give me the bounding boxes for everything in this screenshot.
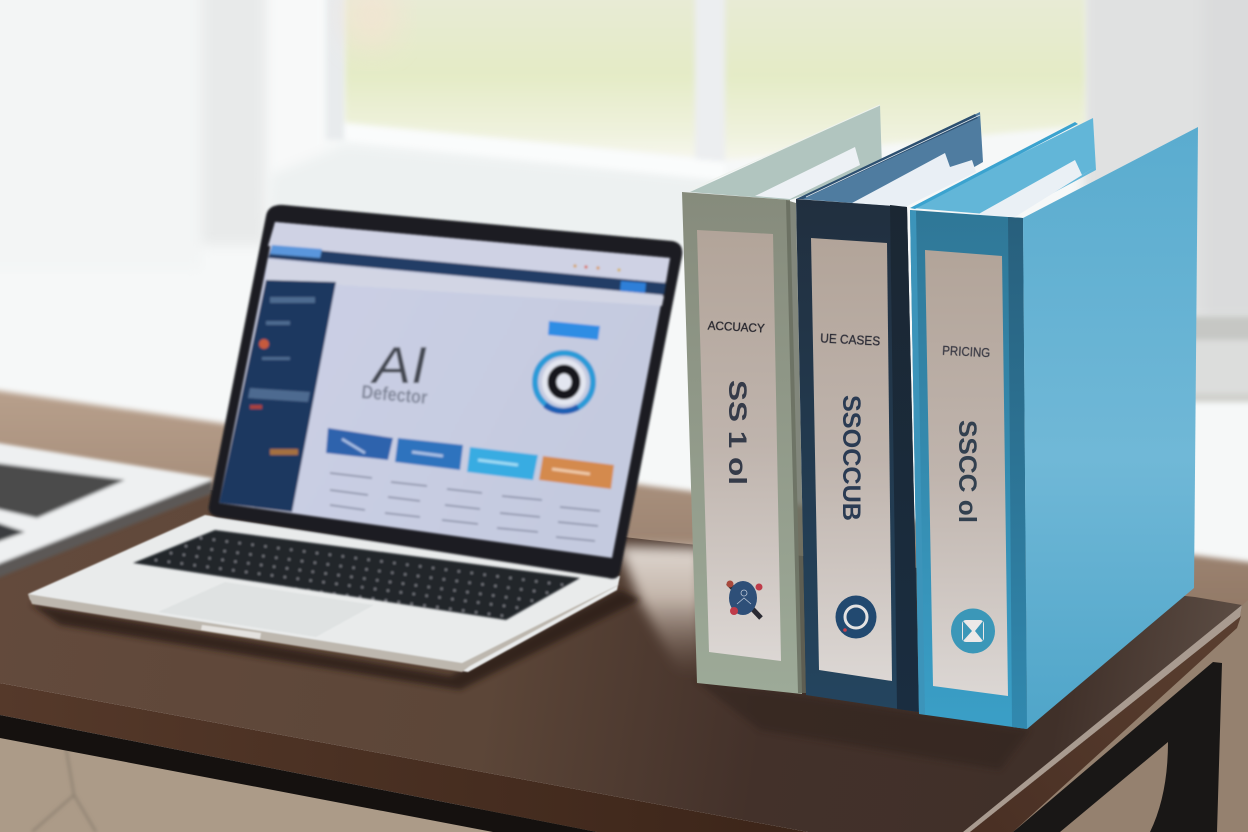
dashboard screen — [219, 222, 670, 558]
front latch — [201, 625, 261, 639]
metal table frame — [1013, 662, 1222, 832]
binder contact shadow — [695, 680, 1030, 770]
front cover face — [1023, 127, 1198, 729]
table top surface — [0, 490, 1242, 832]
table front edge — [0, 683, 808, 832]
peach tint in glass — [344, 0, 400, 50]
icon: teal badge — [951, 608, 995, 654]
blue tab — [270, 245, 322, 258]
tan wainscot band — [0, 388, 1248, 625]
status chip — [548, 321, 600, 340]
vertical label text: SSCC ol — [953, 420, 981, 523]
label title: ACCUACY — [707, 319, 765, 335]
sidebar — [219, 280, 336, 512]
laptop — [28, 205, 682, 672]
back cover top — [800, 112, 983, 207]
cable under table — [32, 748, 96, 832]
Defector label: Defector — [361, 382, 429, 409]
light strip under nav — [266, 260, 664, 306]
laptop base — [28, 515, 620, 672]
back cover spine — [910, 210, 1027, 729]
paper pages — [975, 160, 1095, 217]
floor and wall below table — [0, 730, 620, 832]
spine — [796, 199, 919, 712]
binder: pricing — [910, 118, 1198, 729]
paper pages — [755, 147, 860, 199]
label title: PRICING — [942, 344, 991, 360]
top bar icons — [573, 264, 621, 272]
spine label — [925, 250, 1008, 696]
icon: target badge — [836, 596, 876, 638]
binder: use cases — [796, 112, 983, 712]
table — [0, 490, 1242, 832]
ring gauge — [535, 353, 593, 411]
laptop screen bezel — [209, 205, 682, 579]
paper pages — [852, 153, 976, 207]
AI wordmark: AI — [370, 337, 427, 395]
spine label — [811, 238, 892, 681]
metric tiles — [326, 428, 393, 460]
keyboard — [133, 530, 580, 620]
trackpad — [158, 582, 374, 637]
spine — [682, 192, 802, 694]
sill under the window — [266, 145, 730, 255]
vertical label text: SSOCCUB — [837, 395, 865, 521]
back cover top — [690, 105, 882, 200]
account button — [620, 281, 646, 293]
label title: UE CASES — [820, 330, 881, 349]
spine label — [697, 230, 781, 661]
icon: network badge — [726, 580, 762, 618]
back cover top — [912, 118, 1096, 216]
laptop contact shadow — [30, 590, 640, 690]
table rows — [330, 473, 600, 541]
binder: accuracy — [682, 105, 882, 694]
notebook and tablet on the left — [0, 440, 212, 585]
navy nav bar — [268, 246, 666, 295]
top browser bar — [268, 222, 670, 282]
vertical label text: SS 1 ol — [723, 380, 751, 485]
window glass panes — [345, 0, 1085, 180]
window glare on table — [618, 546, 702, 675]
